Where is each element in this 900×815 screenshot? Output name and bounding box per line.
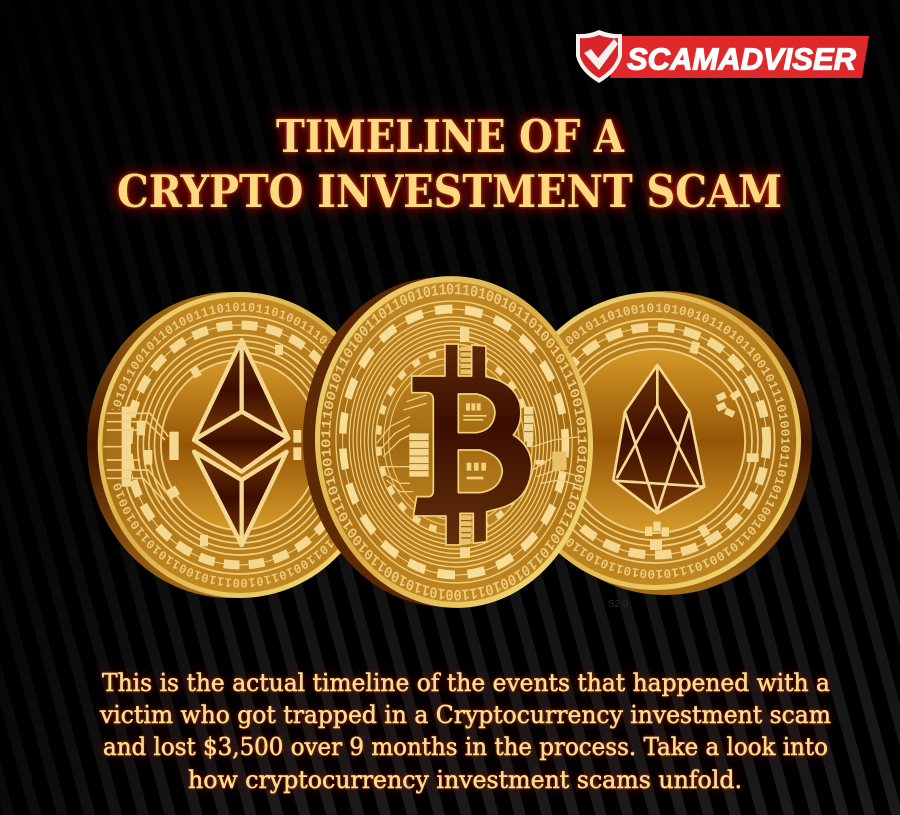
logo wordmark: SCAMADVISER <box>627 42 857 76</box>
coin: Ethereum (left): 101101001110100110101101001011100101101011001011010011101001101011010010111001011010110010110100111010 <box>112 302 334 588</box>
faint watermark: S2 0 <box>608 599 629 610</box>
Ethereum circuit traces <box>103 345 301 546</box>
coin: Bitcoin (center): 0110100101101001011100101101001101100101101001011100101101001101001011010010111001011010011011001011 <box>321 283 587 601</box>
coin: EOS (right): 101001011010110010111010010110101100101101001011101001011010110010110100101110100101101011001011010010 <box>566 303 790 579</box>
Bitcoin circuit traces and chips <box>377 327 583 558</box>
EOS symbol <box>613 365 704 513</box>
Bitcoin symbol inner circuit details <box>463 403 487 479</box>
intro paragraph: victim who got trapped in a Cryptocurrency investment scam <box>99 701 831 729</box>
logo banner <box>610 36 869 78</box>
title <box>117 110 782 218</box>
title: CRYPTO INVESTMENT SCAM <box>117 165 782 218</box>
logo: Scamadviser <box>576 30 869 83</box>
logo shield icon <box>576 30 622 83</box>
intro paragraph: and lost $3,500 over 9 months in the process. Take a look into <box>103 733 828 761</box>
intro paragraph: This is the actual timeline of the events that happened with a <box>102 669 830 697</box>
EOS circuit details <box>645 341 759 550</box>
Ethereum symbol <box>194 340 288 545</box>
intro paragraph <box>99 669 831 794</box>
Bitcoin symbol <box>412 344 532 545</box>
intro paragraph: how cryptocurrency investment scams unfold. <box>188 766 742 794</box>
title: TIMELINE OF A <box>276 110 625 163</box>
